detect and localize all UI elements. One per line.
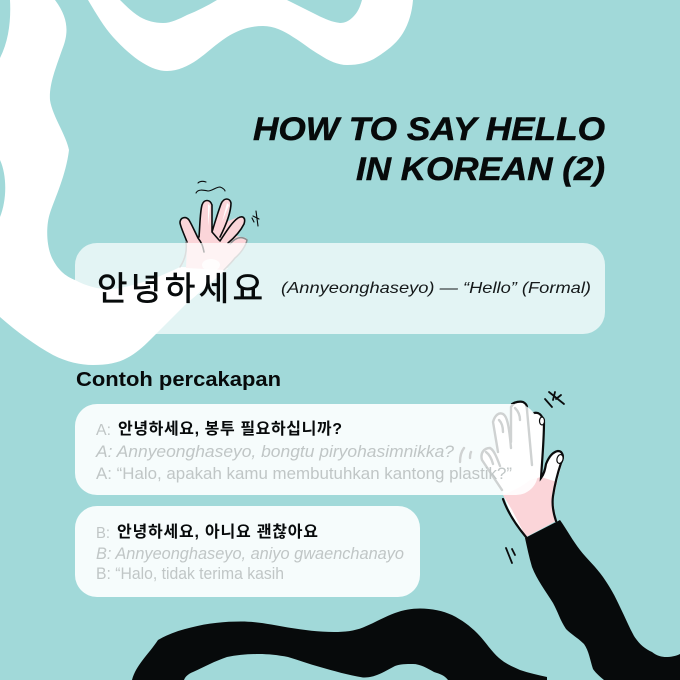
- right arm with black sleeve: [525, 520, 680, 680]
- dialogue A: [95, 420, 512, 483]
- icon: motion marks near right hand: [506, 392, 564, 563]
- greeting in Korean: 안녕하세요: [97, 270, 263, 307]
- title: IN KOREAN (2): [356, 151, 605, 187]
- white ribbon: top: [88, 0, 413, 71]
- panel: greeting: [75, 243, 605, 334]
- dialogue B: B: “Halo, tidak terima kasih: [96, 564, 284, 583]
- greeting romanization and meaning: (Annyeonghaseyo) — “Hello” (Formal): [281, 280, 591, 297]
- title: [253, 111, 605, 187]
- dialogue A: A:: [96, 422, 111, 439]
- dialogue A: 안녕하세요, 봉투 필요하십니까?: [118, 420, 342, 438]
- icon: right hand waving: [481, 402, 564, 537]
- dialogue B: [96, 523, 404, 583]
- black ribbon: bottom: [132, 608, 547, 680]
- icon: motion marks near left hand: [196, 181, 259, 226]
- icon: left hand waving: [180, 199, 247, 270]
- title: HOW TO SAY HELLO: [253, 111, 605, 147]
- icon: palm highlight: [202, 259, 220, 271]
- dialogue A: A: Annyeonghaseyo, bongtu piryohasimnikka?: [95, 442, 455, 461]
- heading: conversation examples: Contoh percakapan: [76, 369, 281, 391]
- dialogue B: B:: [96, 525, 110, 542]
- panel: conversation line A: [75, 404, 538, 495]
- icon: hand fingers seen through panel: [460, 402, 542, 490]
- panel: conversation line B: [75, 506, 420, 597]
- dialogue B: B: Annyeonghaseyo, aniyo gwaenchanayo: [96, 544, 404, 563]
- dialogue A: A: “Halo, apakah kamu membutuhkan kantong plastik?”: [96, 464, 512, 483]
- dialogue B: 안녕하세요, 아니요 괜찮아요: [117, 523, 318, 541]
- white ribbon: left arm: [0, 0, 228, 365]
